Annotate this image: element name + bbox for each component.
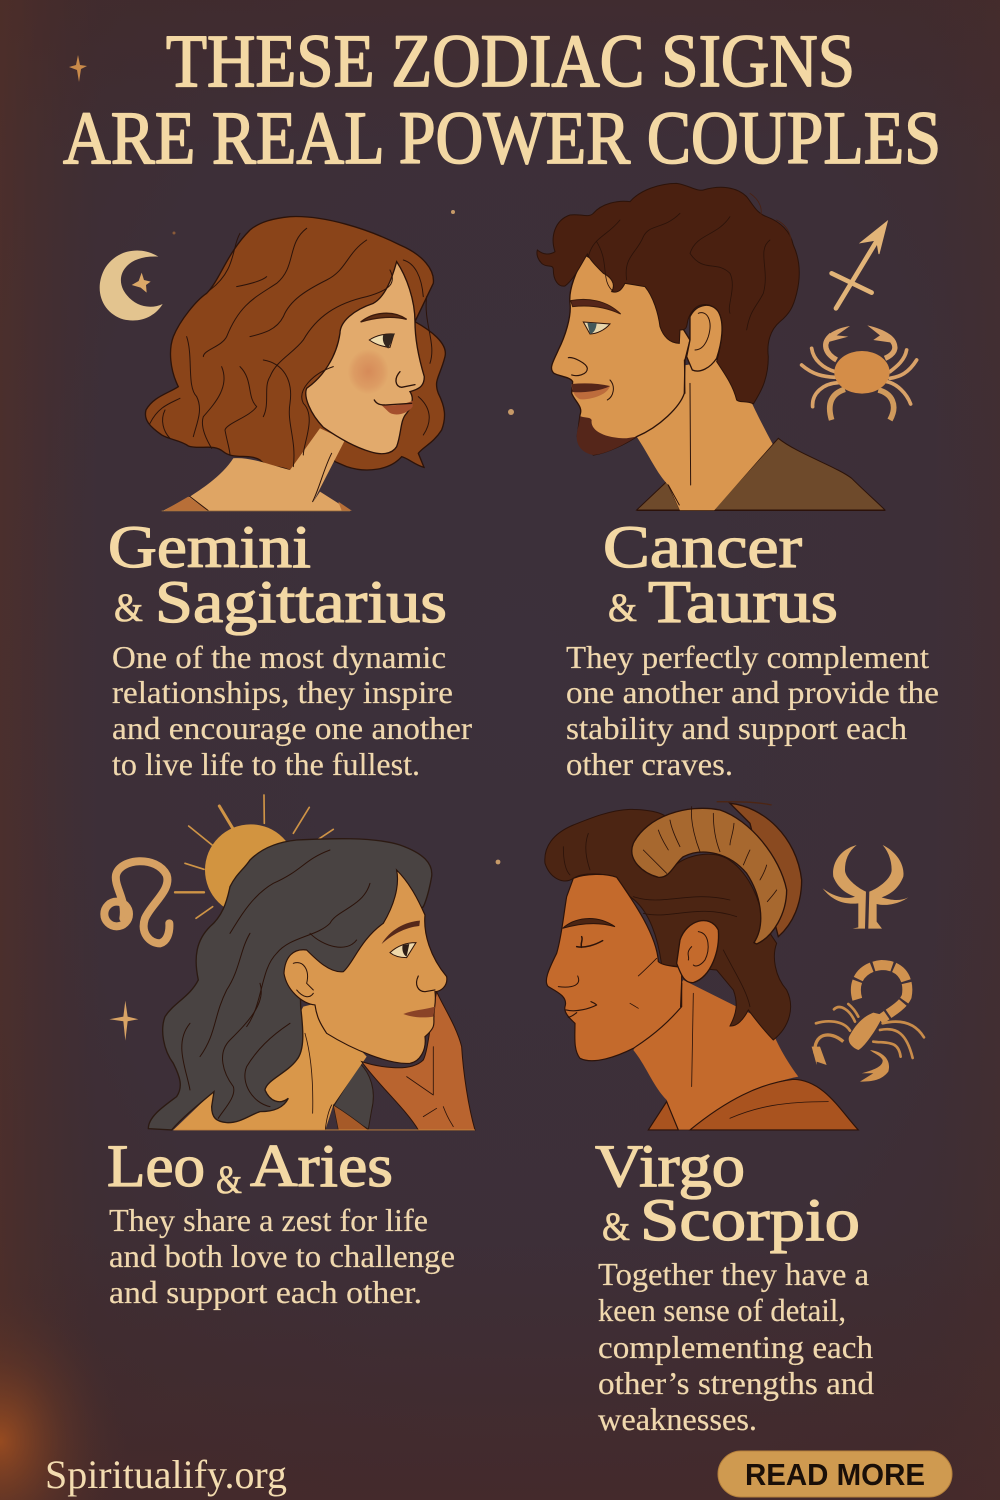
icon: crescent moon <box>100 250 163 320</box>
text: Gemini and Sagittarius description: One of the most dynamic <box>112 639 446 675</box>
text: Cancer and Taurus description: other craves. <box>566 746 733 782</box>
beard <box>577 416 637 455</box>
icon: sun rays <box>175 795 333 918</box>
icon: leo <box>116 861 169 943</box>
ear <box>677 921 719 983</box>
nose <box>568 358 587 376</box>
heading: Gemini and Sagittarius: Gemini <box>108 514 311 580</box>
nose and smile <box>558 976 579 987</box>
text: Leo and Aries description: and support each other. <box>109 1274 422 1310</box>
eye <box>369 334 394 347</box>
neck and shoulders <box>163 428 352 511</box>
text: Virgo and Scorpio description: complementing each <box>598 1329 873 1365</box>
eye <box>583 322 610 334</box>
text: Gemini and Sagittarius description: relationships, they inspire <box>112 674 453 710</box>
footer brand: Spiritualify.org <box>45 1452 287 1497</box>
horn <box>632 808 787 944</box>
brow <box>382 921 420 944</box>
shirt <box>648 1079 858 1130</box>
illustration: man with curly hair and signs <box>537 183 917 511</box>
ear detail <box>293 963 313 997</box>
title: THESE ZODIAC SIGNS <box>166 20 855 103</box>
heading: Gemini and Sagittarius <box>108 514 447 635</box>
text: Cancer and Taurus description: one another and provide the <box>566 674 939 710</box>
hair <box>537 183 799 404</box>
icon: crab <box>802 325 917 420</box>
hair <box>145 217 445 471</box>
title <box>63 20 941 180</box>
heading: Virgo and Scorpio <box>595 1133 860 1253</box>
brow <box>563 919 615 928</box>
text: Cancer and Taurus description <box>566 639 939 782</box>
closed eye <box>577 937 603 947</box>
text: Virgo and Scorpio description: Together they have a <box>598 1256 869 1292</box>
text: Cancer and Taurus description: They perfectly complement <box>566 639 929 675</box>
hair strands <box>588 193 791 330</box>
heading: Gemini and Sagittarius: & <box>114 585 143 630</box>
heading: Virgo and Scorpio: Scorpio <box>640 1187 860 1253</box>
ear <box>687 305 722 371</box>
icon: four-point star <box>109 1001 138 1041</box>
face <box>551 255 690 455</box>
face <box>284 870 447 1063</box>
icon: sagittarius <box>832 221 887 308</box>
text: Gemini and Sagittarius description: and encourage one another <box>112 710 472 746</box>
hair <box>148 839 432 1130</box>
clothing <box>333 1105 368 1130</box>
heading: Leo and Aries: Aries <box>250 1133 393 1199</box>
text: Virgo and Scorpio description: other’s strengths and <box>598 1365 874 1401</box>
text: Leo and Aries description: They share a zest for life <box>109 1202 428 1238</box>
text: Leo and Aries description: and both love to challenge <box>109 1238 455 1274</box>
icon: title sparkle <box>69 55 87 82</box>
shirt <box>637 438 885 510</box>
illustration: woman with dark hair and sun <box>104 795 475 1130</box>
hair strands <box>150 228 432 467</box>
icon: scorpion <box>812 965 924 1082</box>
hair strands <box>563 833 750 1007</box>
text: Leo and Aries description <box>109 1202 455 1310</box>
face <box>546 874 682 1061</box>
heading: Gemini and Sagittarius: Sagittarius <box>155 569 447 635</box>
panel: Virgo and Scorpio <box>545 802 924 1437</box>
text: Gemini and Sagittarius description <box>112 639 472 782</box>
illustration: man with ram horn <box>545 802 924 1130</box>
face <box>306 262 424 454</box>
heading: Leo and Aries: Leo <box>107 1133 205 1199</box>
panel: Gemini and Sagittarius <box>100 183 917 782</box>
text: Virgo and Scorpio description <box>598 1256 874 1437</box>
body lines <box>305 1033 453 1130</box>
read more button: READ MORE <box>745 1457 925 1492</box>
brow <box>571 299 621 314</box>
icon: moon star <box>132 273 151 293</box>
text: Virgo and Scorpio description: keen sense of detail, <box>598 1292 846 1328</box>
text: Virgo and Scorpio description: weaknesses. <box>598 1401 757 1437</box>
decorative stars <box>172 210 514 864</box>
freckles blush <box>348 349 389 394</box>
hand <box>362 992 475 1130</box>
neck <box>637 360 773 511</box>
panel: Cancer and Taurus text <box>566 514 939 782</box>
heading: Cancer and Taurus <box>603 514 838 635</box>
icon: taurus-like horns glyph <box>823 845 908 929</box>
illustration: woman with auburn hair and moon <box>100 217 445 511</box>
panel: Leo and Aries <box>104 795 475 1310</box>
back lower hair <box>333 1063 373 1129</box>
heading: Virgo and Scorpio: & <box>602 1204 630 1249</box>
heading: Cancer and Taurus: Taurus <box>648 569 838 635</box>
nose and lips <box>417 976 435 992</box>
neck and shoulders <box>173 1003 367 1130</box>
heading: Leo and Aries <box>107 1133 393 1202</box>
nose and lips <box>396 372 415 387</box>
heading: Virgo and Scorpio: Virgo <box>595 1133 745 1199</box>
clothing <box>164 497 352 511</box>
brow <box>361 313 407 322</box>
hair <box>545 809 791 1040</box>
text: Gemini and Sagittarius description: to live life to the fullest. <box>112 746 420 782</box>
read more button <box>718 1451 952 1497</box>
heading: Leo and Aries: & <box>216 1157 242 1202</box>
neck <box>633 980 798 1130</box>
heading: Cancer and Taurus: Cancer <box>603 514 802 580</box>
text: Cancer and Taurus description: stability and support each <box>566 710 907 746</box>
hair strands <box>182 850 370 1118</box>
neck line <box>668 360 691 505</box>
heading: Cancer and Taurus: & <box>608 585 637 630</box>
eye <box>390 943 416 958</box>
icon: sun disc <box>205 824 296 916</box>
moustache and mouth <box>572 384 610 399</box>
horn back band <box>730 803 802 937</box>
